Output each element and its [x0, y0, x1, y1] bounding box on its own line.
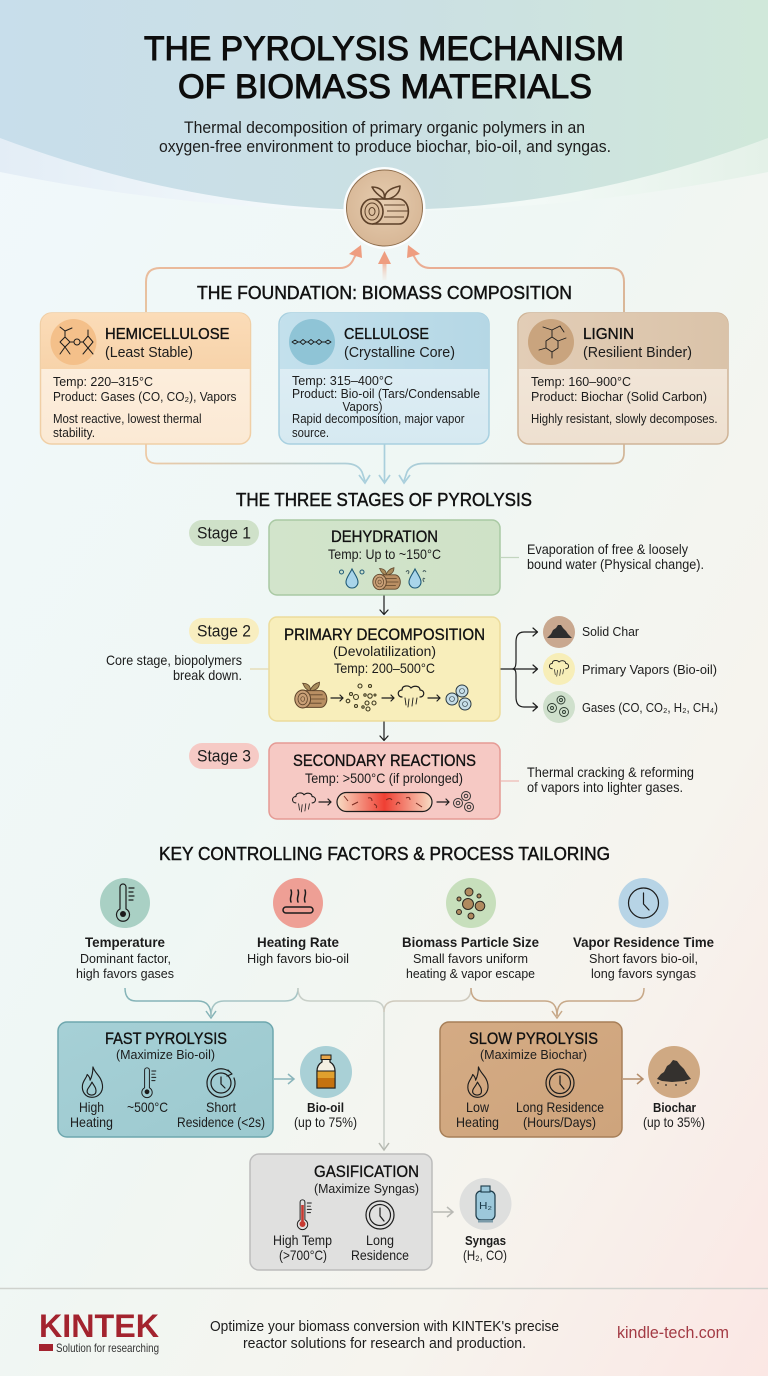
callout: stage 1 [501, 541, 704, 572]
panel: fast pyrolysis: High [79, 1099, 104, 1115]
panel: stage 1 dehydration: DEHYDRATION [331, 527, 438, 546]
icon: lignin molecule [528, 319, 574, 365]
stage 3 badge [189, 743, 259, 769]
panel: gasification: Long [366, 1232, 394, 1248]
panel: gasification: High Temp [273, 1232, 332, 1248]
panel: slow pyrolysis: (Maximize Biochar) [480, 1047, 587, 1062]
panel: stage 2 primary decomposition: (Devolatilization) [333, 643, 436, 659]
product: gases: Gases (CO, CO₂, H₂, CH₄) [582, 700, 718, 715]
panel: hemicellulose [40, 313, 250, 444]
callout: stage 1: Evaporation of free & loosely [527, 541, 688, 557]
call to action: Optimize your biomass conversion with KINTEK's precise [210, 1318, 559, 1335]
subtitle [159, 118, 611, 156]
logo: KINTEK: Solution for researching [56, 1341, 159, 1355]
panel: hemicellulose: Most reactive, lowest thermal [53, 411, 202, 426]
panel: stage 3 secondary reactions: SECONDARY REACTIONS [293, 751, 476, 770]
panel: stage 1 dehydration: Temp: Up to ~150°C [328, 546, 441, 562]
panel: slow pyrolysis: Low [466, 1099, 490, 1115]
panel: fast pyrolysis: (Maximize Bio-oil) [116, 1047, 215, 1062]
panel: fast pyrolysis: ~500°C [127, 1099, 168, 1115]
callout: stage 1: bound water (Physical change). [527, 556, 704, 572]
panel: lignin: (Resilient Binder) [583, 344, 692, 361]
callout: stage 3 [501, 764, 694, 795]
arrows: composition to stages [146, 444, 624, 483]
panel: slow pyrolysis: (Hours/Days) [523, 1114, 596, 1130]
icon: clock [366, 1201, 394, 1229]
factor: temperature [76, 878, 174, 981]
panel: cellulose: CELLULOSE [344, 326, 429, 343]
stage 2 badge [189, 618, 259, 644]
arrows: stage 2 products [501, 628, 538, 711]
panel: hemicellulose: HEMICELLULOSE [105, 326, 230, 343]
product: syngas: Syngas [465, 1233, 506, 1248]
product: bio-oil: (up to 75%) [294, 1114, 357, 1130]
panel: fast pyrolysis: Residence (<2s) [177, 1114, 265, 1130]
title: OF BIOMASS MATERIALS [178, 68, 592, 106]
call to action [210, 1318, 559, 1352]
panel: lignin: Product: Biochar (Solid Carbon) [531, 389, 707, 404]
icon: short clock [207, 1069, 235, 1097]
arrow: stage 2 to 3 [380, 722, 388, 740]
icon: clock [546, 1069, 574, 1097]
panel: fast pyrolysis [58, 1022, 273, 1137]
icon: hot thermometer [297, 1200, 311, 1230]
panel: gasification: (Maximize Syngas) [314, 1181, 419, 1196]
subtitle: Thermal decomposition of primary organic polymers in an [184, 118, 585, 137]
panel: gasification: GASIFICATION [314, 1162, 419, 1181]
heading: three stages: THE THREE STAGES OF PYROLYSIS [236, 490, 532, 510]
arrow: slow to biochar [623, 1074, 643, 1084]
product: solid char [543, 616, 640, 648]
product: solid char: Solid Char [582, 624, 640, 639]
icon: cracking reactor [293, 792, 474, 812]
website: kindle-tech.com [617, 1323, 729, 1342]
panel: cellulose: Rapid decomposition, major vapor [292, 411, 465, 426]
product: bio-oil: Bio-oil [307, 1100, 344, 1115]
product: primary vapors [543, 653, 717, 685]
subtitle: oxygen-free environment to produce biochar, bio-oil, and syngas. [159, 137, 611, 156]
factor: biomass particle size [402, 878, 539, 981]
callout: stage 3: Thermal cracking & reforming [527, 764, 694, 780]
icon: flame [82, 1067, 103, 1097]
panel: stage 2 primary decomposition [269, 617, 500, 721]
factor: heating rate: Heating Rate [257, 934, 339, 950]
factor: temperature: Temperature [85, 934, 165, 950]
factor: heating rate [247, 878, 349, 966]
stage 3 badge: Stage 3 [197, 746, 251, 766]
callout: stage 2 [106, 652, 269, 683]
panel: hemicellulose: (Least Stable) [105, 344, 193, 361]
panel: cellulose: source. [292, 425, 329, 440]
product: gases [543, 691, 718, 723]
product: syngas: (H₂, CO) [463, 1247, 507, 1263]
header swoosh [0, 0, 768, 211]
icon: hemicellulose molecule [50, 319, 96, 365]
factor: vapor residence time [573, 878, 714, 981]
panel: slow pyrolysis: Heating [456, 1114, 499, 1130]
arrows: factors to processes [125, 988, 644, 1150]
panel: slow pyrolysis [440, 1022, 622, 1137]
icon: water drops and log [340, 568, 426, 590]
product: syngas: H₂ [479, 1201, 492, 1212]
arrow: stage 1 to 2 [380, 596, 388, 614]
panel: fast pyrolysis: Heating [70, 1114, 113, 1130]
heading: foundation: THE FOUNDATION: BIOMASS COMPOSITION [197, 283, 572, 303]
callout: stage 3: of vapors into lighter gases. [527, 779, 683, 795]
factor: vapor residence time: long favors syngas [591, 966, 696, 981]
product: syngas [460, 1178, 512, 1263]
panel: cellulose: Vapors) [342, 399, 382, 414]
icon: biomass log with leaves [344, 167, 426, 249]
icon: log to particles to vapor to gas [295, 682, 471, 711]
title: THE PYROLYSIS MECHANISM [144, 30, 624, 68]
panel: gasification: (>700°C) [279, 1247, 327, 1263]
panel: stage 3 secondary reactions: Temp: >500°C (if prolonged) [305, 770, 463, 786]
panel: hemicellulose: stability. [53, 425, 95, 440]
panel: lignin: LIGNIN [583, 326, 634, 343]
icon: cellulose chain [289, 319, 335, 365]
icon: thermometer [142, 1068, 156, 1098]
icon: flame [468, 1067, 488, 1097]
panel: stage 2 primary decomposition: PRIMARY DECOMPOSITION [284, 625, 485, 644]
product: biochar: (up to 35%) [643, 1114, 705, 1130]
title [144, 30, 624, 106]
panel: cellulose: Temp: 315–400°C [292, 373, 393, 388]
panel: hemicellulose: Product: Gases (CO, CO₂), Vapors [53, 389, 237, 404]
arrow: gasification to syngas [433, 1207, 453, 1217]
product: biochar: Biochar [653, 1100, 696, 1115]
panel: lignin: Temp: 160–900°C [531, 374, 631, 389]
panel: stage 3 secondary reactions [269, 743, 500, 819]
arrow: fast to bio-oil [274, 1074, 294, 1084]
factor: biomass particle size: heating & vapor escape [406, 966, 535, 981]
arrows: composition to biomass [146, 245, 624, 312]
callout: stage 2: break down. [173, 667, 242, 683]
stage 2 badge: Stage 2 [197, 622, 251, 640]
panel: lignin: Highly resistant, slowly decomposes. [531, 411, 718, 426]
product: bio-oil [294, 1046, 357, 1130]
call to action: reactor solutions for research and production. [243, 1335, 526, 1352]
panel: stage 2 primary decomposition: Temp: 200–500°C [334, 660, 435, 676]
panel: hemicellulose: Temp: 220–315°C [53, 374, 153, 389]
panel: stage 1 dehydration [269, 520, 500, 595]
footer [0, 1288, 768, 1355]
stage 1 badge: Stage 1 [197, 524, 251, 542]
factor: biomass particle size: Biomass Particle Size [402, 934, 539, 950]
logo: KINTEK: KINTEK [39, 1308, 159, 1344]
factor: vapor residence time: Vapor Residence Time [573, 934, 714, 950]
panel: slow pyrolysis: Long Residence [516, 1099, 604, 1115]
panel: fast pyrolysis: FAST PYROLYSIS [105, 1029, 227, 1048]
stage 1 badge [189, 520, 259, 546]
heading: key factors: KEY CONTROLLING FACTORS & PROCESS TAILORING [159, 844, 610, 864]
product: primary vapors: Primary Vapors (Bio-oil) [582, 662, 717, 677]
callout: stage 2: Core stage, biopolymers [106, 652, 242, 668]
factor: temperature: high favors gases [76, 966, 174, 981]
panel: cellulose: Product: Bio-oil (Tars/Condensable [292, 386, 480, 401]
panel: slow pyrolysis: SLOW PYROLYSIS [469, 1029, 598, 1048]
panel: gasification: Residence [351, 1247, 409, 1263]
factor: heating rate: High favors bio-oil [247, 951, 349, 966]
factor: vapor residence time: Short favors bio-oil, [589, 951, 698, 966]
panel: cellulose: (Crystalline Core) [344, 344, 455, 361]
factor: biomass particle size: Small favors uniform [413, 951, 528, 966]
panel: fast pyrolysis: Short [206, 1099, 236, 1115]
product: biochar [643, 1046, 705, 1130]
panel: cellulose [279, 313, 489, 444]
factor: temperature: Dominant factor, [80, 951, 171, 966]
panel: lignin [518, 313, 728, 444]
panel: gasification [250, 1154, 432, 1270]
